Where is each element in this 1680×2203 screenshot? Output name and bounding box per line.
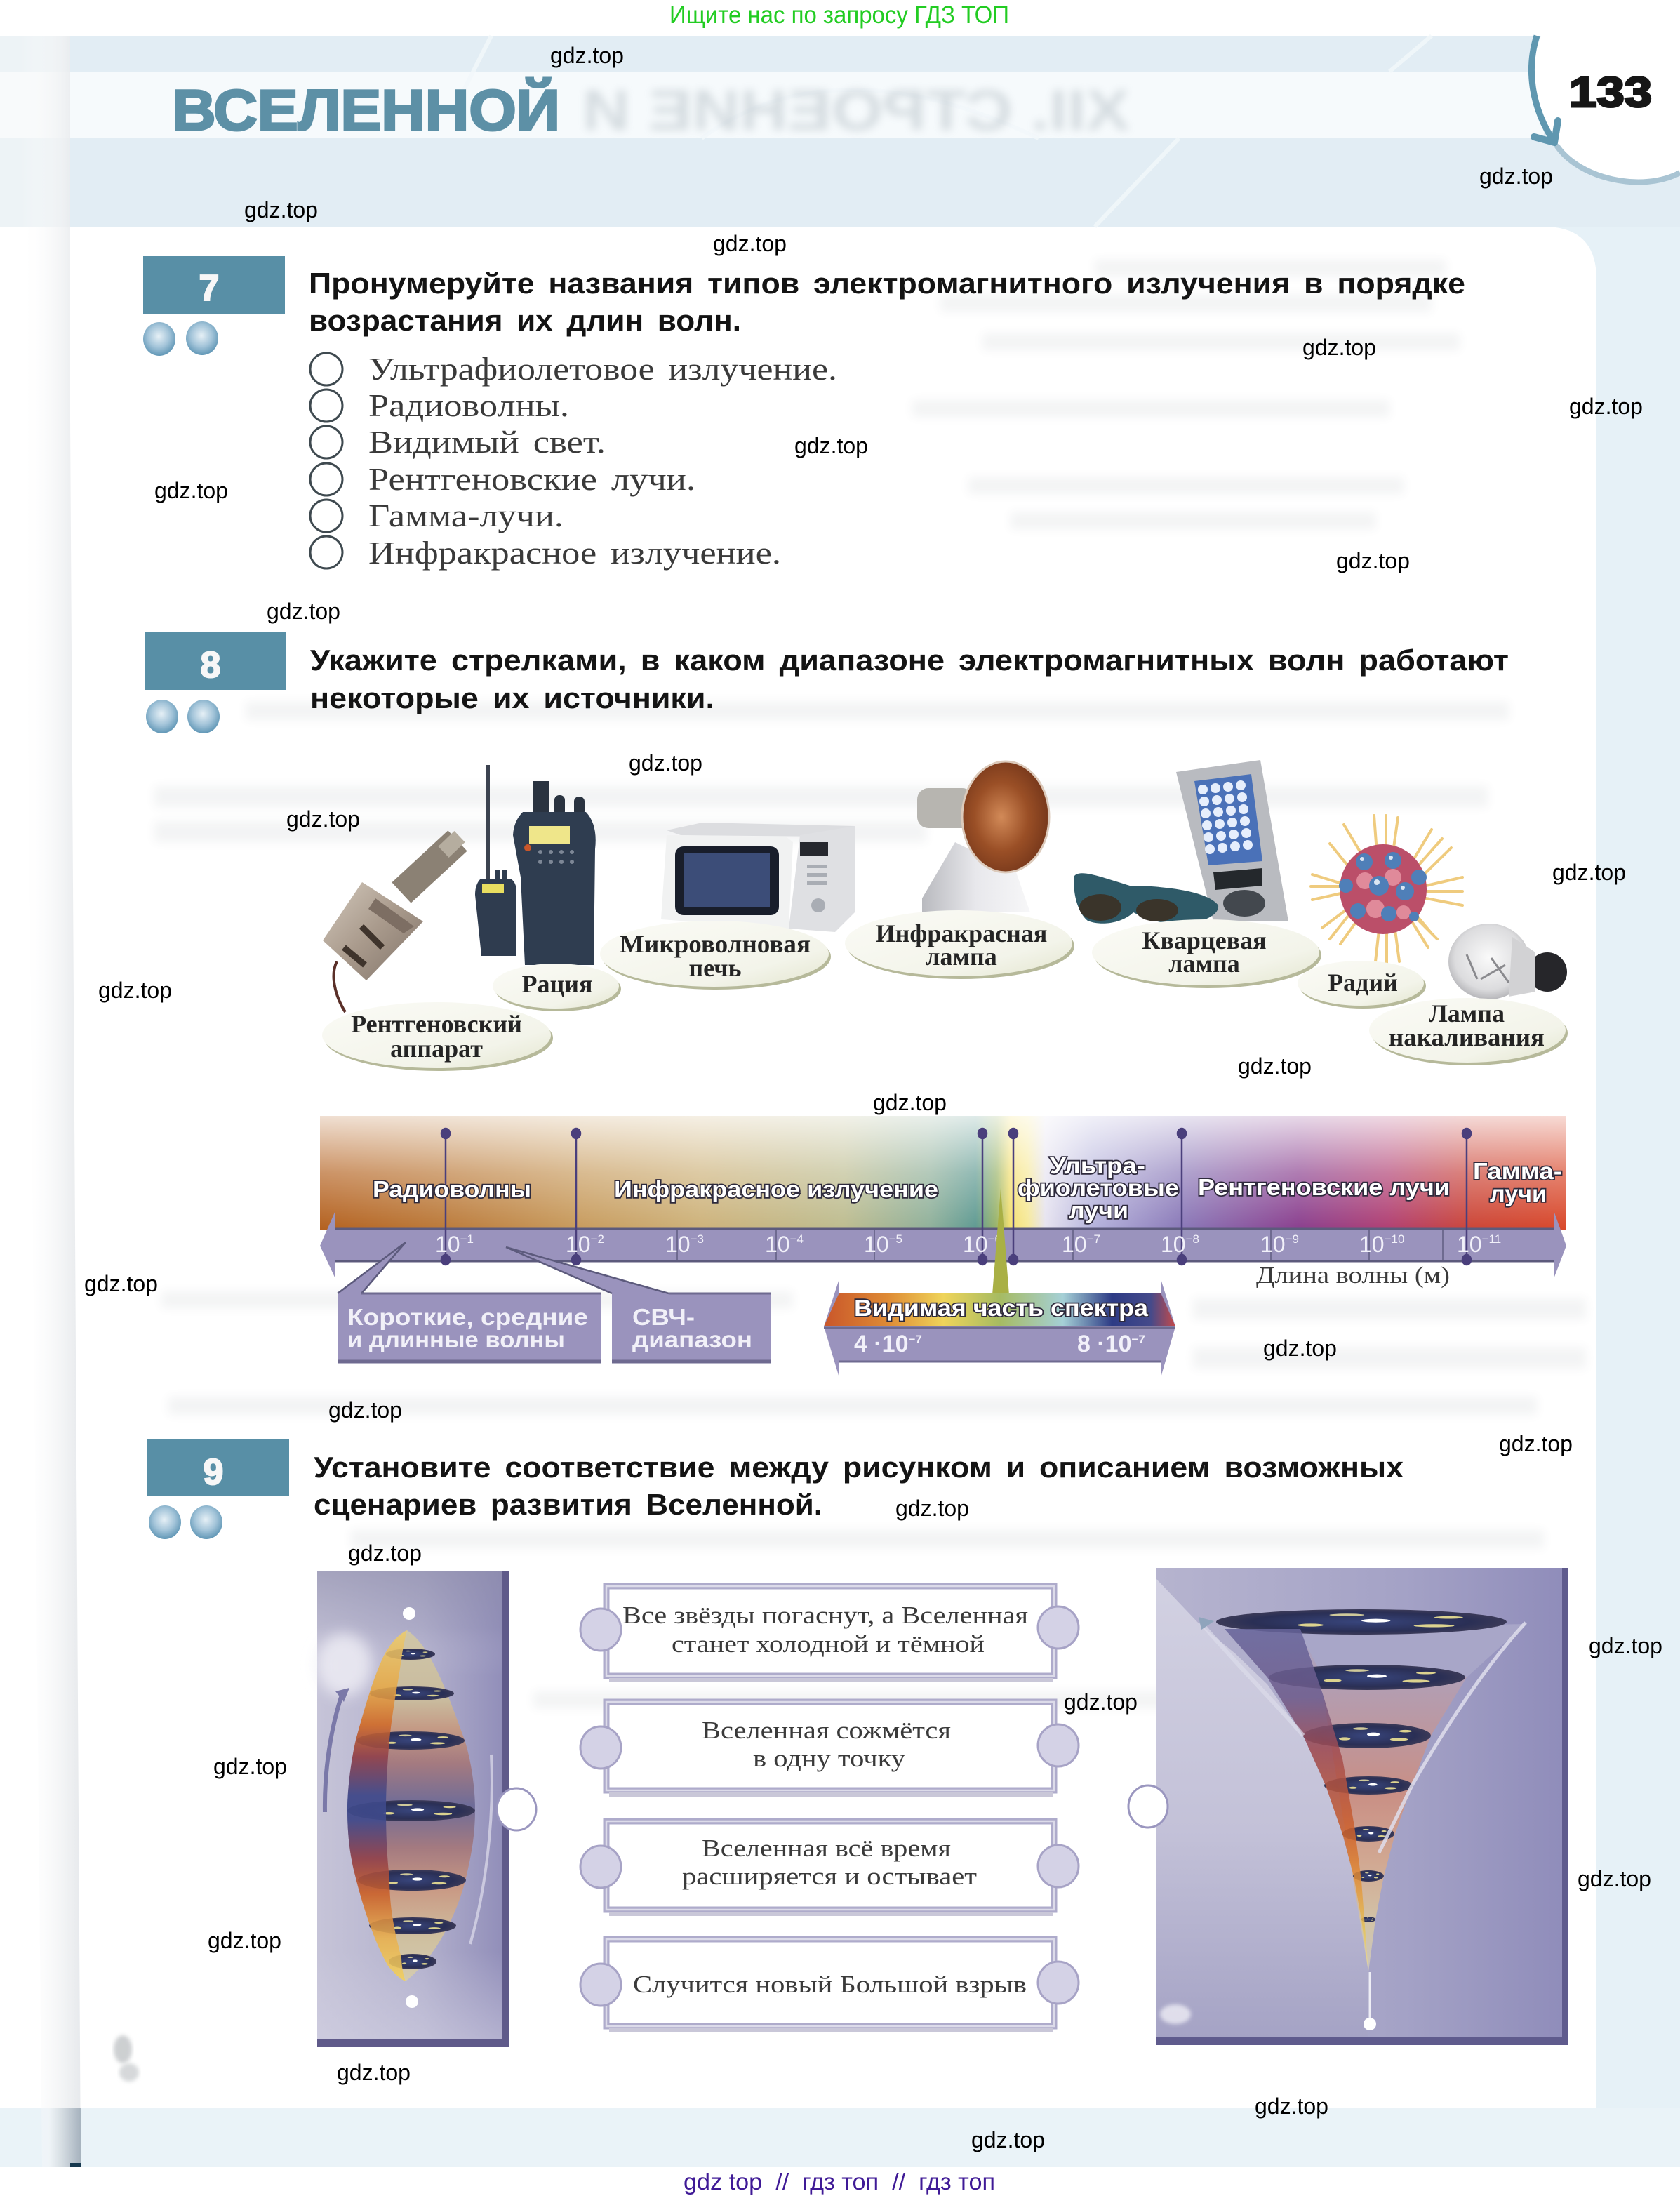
option: universe collapses xyxy=(580,1702,1079,1795)
watermarks: gdz.top xyxy=(629,750,702,776)
watermarks: gdz.top xyxy=(1479,164,1553,189)
option: new Big Bang: Случится новый Большой взрыв xyxy=(633,1971,1027,1998)
axis tick values: −11 xyxy=(1482,1232,1501,1246)
watermarks: gdz.top xyxy=(1552,860,1626,885)
callout: microwave band: СВЧ- xyxy=(632,1304,695,1330)
mirrored ghost heading: XII. СТРОЕНИЕ И xyxy=(582,79,1130,142)
watermarks: gdz.top xyxy=(208,1928,281,1953)
checklist of radiation types: Гамма-лучи. xyxy=(368,498,564,533)
watermarks: gdz.top xyxy=(1589,1633,1662,1658)
watermarks: gdz.top xyxy=(971,2127,1045,2152)
watermarks: gdz.top xyxy=(1578,1866,1651,1891)
checklist of radiation types: Инфракрасное излучение. xyxy=(368,535,781,571)
label: infrared lamp xyxy=(845,910,1074,979)
label: radium: Радий xyxy=(1328,969,1398,997)
checklist of radiation types: Видимый свет. xyxy=(368,424,606,460)
watermarks: gdz.top xyxy=(1336,548,1410,573)
band labels: Рентгеновские лучи xyxy=(1198,1174,1450,1200)
watermarks: gdz.top xyxy=(348,1540,422,1566)
heading 8 xyxy=(310,644,1509,714)
axis tick values: 10 xyxy=(864,1232,889,1257)
callout: short, medium and long waves: Короткие, средние xyxy=(347,1304,588,1330)
watermarks: gdz.top xyxy=(1263,1336,1337,1361)
chart: visible part of spectrum: 4 ·10 xyxy=(854,1331,908,1357)
option: new Big Bang xyxy=(580,1939,1079,2030)
option: stars die out xyxy=(580,1586,1079,1680)
exercise 8 xyxy=(145,632,1568,1378)
chapter title xyxy=(172,78,1130,142)
page number with curved arrow: 133 xyxy=(1569,69,1652,116)
watermarks: gdz.top xyxy=(1064,1689,1138,1715)
icon: small walkie-talkie xyxy=(475,765,516,956)
icon: x-ray tube xyxy=(323,837,460,1012)
axis tick values: 10 xyxy=(1161,1232,1186,1257)
axis tick values: 10 xyxy=(1260,1232,1286,1257)
badge 9 xyxy=(147,1439,289,1539)
band labels: лучи xyxy=(1490,1180,1547,1206)
axis tick values xyxy=(435,1232,1501,1257)
watermarks: gdz.top xyxy=(1569,394,1643,419)
label: infrared lamp: лампа xyxy=(926,943,997,971)
axis tick values: −6 xyxy=(988,1232,1001,1246)
axis tick values: 10 xyxy=(765,1232,790,1257)
top banner text: Ищите нас по запросу ГДЗ ТОП xyxy=(669,1,1009,29)
badge 8 xyxy=(145,632,286,733)
heading 9: Установите соответствие между рисунком и описанием возможных xyxy=(314,1451,1404,1484)
callout: microwave band: диапазон xyxy=(632,1326,752,1352)
band labels: Гамма- xyxy=(1473,1158,1562,1184)
heading 7: возрастания их длин волн. xyxy=(309,304,741,337)
label: microwave xyxy=(600,921,831,990)
option: stars die out: Все звёзды погаснут, а Вселенная xyxy=(622,1602,1028,1629)
panel: open universe diagram xyxy=(1156,1568,1568,2045)
exercise 7 xyxy=(143,256,1465,571)
label: microwave: Микроволновая xyxy=(620,930,811,958)
chart: electromagnetic spectrum xyxy=(320,1116,1566,1289)
option: universe collapses: в одну точку xyxy=(753,1745,906,1772)
option: universe collapses: Вселенная сожмётся xyxy=(702,1717,951,1744)
axis tick values: −1 xyxy=(460,1232,474,1246)
spectrum gradient bar xyxy=(320,1116,1566,1230)
chart: visible part of spectrum: Видимая часть спектра xyxy=(854,1295,1149,1321)
watermarks: gdz.top xyxy=(154,478,228,503)
watermarks: gdz.top xyxy=(267,599,340,624)
funnel right side xyxy=(1300,1629,1467,1972)
marker circle: left diagram xyxy=(497,1788,536,1830)
watermarks: gdz.top xyxy=(328,1397,402,1423)
exercise 9 xyxy=(147,1439,1568,2047)
axis tick values: −9 xyxy=(1286,1232,1299,1246)
badge 8: 8 xyxy=(201,645,220,686)
label: x-ray apparatus: Рентгеновский xyxy=(351,1010,522,1038)
icon: incandescent lamp xyxy=(1448,924,1567,999)
option: universe keeps expanding xyxy=(580,1821,1079,1914)
badge 7: 7 xyxy=(199,268,219,309)
band labels: фиолетовые xyxy=(1018,1175,1179,1201)
label: quartz lamp: Кварцевая xyxy=(1142,926,1267,954)
axis tick values: 10 xyxy=(566,1232,591,1257)
bleed-through text from reverse page xyxy=(154,260,1586,1708)
heading 7 xyxy=(309,267,1465,337)
watermarks: gdz.top xyxy=(84,1271,158,1296)
visible range arrow xyxy=(824,1279,1175,1378)
heading 8: Укажите стрелками, в каком диапазоне электромагнитных волн работают xyxy=(310,644,1509,677)
watermarks: gdz.top xyxy=(713,231,787,256)
axis tick values: 10 xyxy=(963,1232,988,1257)
label: incandescent lamp: накаливания xyxy=(1389,1023,1545,1051)
heading 8: некоторые их источники. xyxy=(310,681,714,714)
badge 9: 9 xyxy=(204,1452,223,1493)
option: universe keeps expanding: расширяется и остывает xyxy=(682,1863,977,1890)
axis tick values: −5 xyxy=(889,1232,902,1246)
label: incandescent lamp: Лампа xyxy=(1429,999,1505,1027)
watermarks: gdz.top xyxy=(1499,1431,1573,1456)
checklist of radiation types: Радиоволны. xyxy=(368,387,569,423)
marker pins xyxy=(441,1129,1471,1265)
axis tick values: −4 xyxy=(790,1232,804,1246)
marker circle: right diagram xyxy=(1128,1785,1168,1828)
chart: visible part of spectrum: −7 xyxy=(1131,1333,1145,1346)
badge 7 xyxy=(143,256,285,356)
axis tick values: −10 xyxy=(1385,1232,1404,1246)
label: microwave: печь xyxy=(688,954,742,982)
label: walkie-talkie xyxy=(493,964,621,1011)
option: stars die out: станет холодной и тёмной xyxy=(672,1630,985,1658)
label: radium xyxy=(1298,961,1426,1009)
watermarks: gdz.top xyxy=(895,1496,969,1521)
watermarks: gdz.top xyxy=(244,197,318,222)
label: infrared lamp: Инфракрасная xyxy=(876,919,1047,947)
pointer to visible range xyxy=(992,1188,1009,1295)
visible spectrum strip xyxy=(824,1293,1175,1326)
band labels: Радиоволны xyxy=(373,1176,531,1202)
lighter area left of the funnel xyxy=(1156,1579,1368,2037)
watermarks: gdz.top xyxy=(873,1090,947,1115)
checklist of radiation types: Ультрафиолетовое излучение. xyxy=(368,351,837,387)
axis tick values: −3 xyxy=(691,1232,704,1246)
watermarks: gdz.top xyxy=(98,978,172,1003)
chart: visible part of spectrum: 8 ·10 xyxy=(1077,1331,1131,1357)
panel: closed universe diagram xyxy=(316,1571,509,2047)
heading 7: Пронумеруйте названия типов электромагнитного излучения в порядке xyxy=(309,267,1465,300)
callout: short, medium and long waves: и длинные волны xyxy=(347,1326,565,1352)
label: incandescent lamp xyxy=(1369,998,1568,1065)
watermarks: gdz.top xyxy=(337,2060,411,2085)
axis tick values: −2 xyxy=(591,1232,604,1246)
label: x-ray apparatus: аппарат xyxy=(390,1034,483,1063)
chapter title: ВСЕЛЕННОЙ xyxy=(172,78,560,142)
watermarks: gdz.top xyxy=(213,1754,287,1779)
icon: radium atom xyxy=(1311,816,1462,963)
left half of spindle xyxy=(347,1630,407,1981)
spindle body xyxy=(347,1630,475,1981)
funnel left side xyxy=(1225,1629,1368,1972)
callout: microwave band xyxy=(506,1247,771,1363)
watermarks: gdz.top xyxy=(794,433,868,458)
axis tick values: 10 xyxy=(665,1232,691,1257)
watermarks: gdz.top xyxy=(286,806,360,832)
callout: short, medium and long waves xyxy=(338,1242,601,1363)
watermarks: gdz.top xyxy=(550,43,624,68)
axis tick values: −7 xyxy=(1087,1232,1100,1246)
heading 9: сценариев развития Вселенной. xyxy=(314,1488,822,1521)
heading 9 xyxy=(314,1451,1404,1521)
axis tick values: 10 xyxy=(1457,1232,1482,1257)
axis tick values: 10 xyxy=(1359,1232,1385,1257)
chart: visible part of spectrum: −7 xyxy=(908,1333,922,1346)
icon: microwave oven xyxy=(661,823,855,932)
axis tick values: 10 xyxy=(1062,1232,1087,1257)
band labels: Ультра- xyxy=(1050,1152,1145,1178)
watermarks: gdz.top xyxy=(1238,1053,1312,1079)
checklist of radiation types xyxy=(310,351,837,571)
wavelength axis arrow xyxy=(320,1211,1566,1279)
axis title: Длина волны (м) xyxy=(1256,1263,1450,1289)
axis tick values: −8 xyxy=(1186,1232,1199,1246)
chart: visible part of spectrum xyxy=(824,1188,1175,1378)
label: quartz lamp: лампа xyxy=(1168,950,1240,978)
checklist of radiation types: Рентгеновские лучи. xyxy=(368,461,695,497)
band labels xyxy=(373,1152,1562,1223)
band labels: Инфракрасное излучение xyxy=(614,1176,938,1202)
band labels: лучи xyxy=(1069,1197,1128,1223)
bottom footer links: gdz top // гдз топ // гдз топ xyxy=(684,2169,995,2195)
label: x-ray apparatus xyxy=(322,1002,553,1071)
icon: infrared lamp xyxy=(917,761,1049,912)
icon: large walkie-talkie xyxy=(513,781,596,965)
label: quartz lamp xyxy=(1092,919,1321,988)
watermarks: gdz.top xyxy=(1302,335,1376,360)
option: universe keeps expanding: Вселенная всё время xyxy=(702,1835,951,1862)
page number with curved arrow xyxy=(1531,36,1680,183)
label: walkie-talkie: Рация xyxy=(522,970,592,998)
watermarks: gdz.top xyxy=(1255,2094,1328,2119)
icon: quartz lamp with goggles xyxy=(1074,760,1288,924)
axis tick values: 10 xyxy=(435,1232,460,1257)
